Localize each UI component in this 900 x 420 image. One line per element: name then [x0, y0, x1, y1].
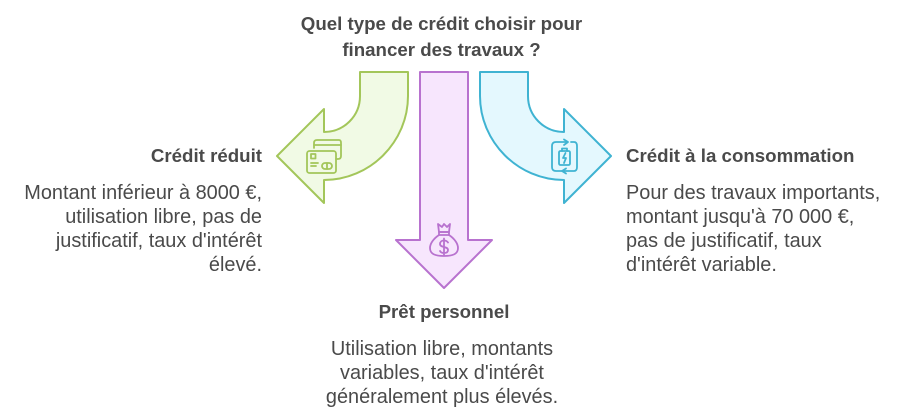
description: crédit réduit: justificatif, taux d'intérêt	[56, 230, 262, 252]
description: crédit à la consommation	[626, 182, 880, 276]
description: crédit réduit: élevé.	[209, 254, 262, 276]
heading: crédit réduit: Crédit réduit	[151, 145, 262, 166]
icon: money bag	[430, 224, 458, 256]
title: financer des travaux ?	[342, 39, 541, 60]
description: prêt personnel: variables, taux d'intérêt	[340, 362, 544, 384]
description: crédit à la consommation: Pour des travaux importants,	[626, 182, 880, 204]
description: crédit réduit: Montant inférieur à 8000 €,	[24, 182, 262, 204]
text block: crédit à la consommation	[626, 145, 880, 276]
description: crédit réduit	[24, 182, 262, 276]
arrow: crédit réduit (green)	[277, 72, 408, 203]
arrow: prêt personnel (purple)	[396, 72, 492, 288]
description: crédit à la consommation: pas de justificatif, taux	[626, 230, 822, 252]
description: crédit à la consommation: montant jusqu'à 70 000 €,	[626, 206, 854, 228]
description: prêt personnel: généralement plus élevés.	[326, 386, 558, 408]
icon: credit cards	[307, 140, 341, 173]
title: Quel type de crédit choisir pour	[301, 13, 582, 34]
text block: prêt personnel	[326, 301, 558, 408]
description: prêt personnel: Utilisation libre, montants	[331, 338, 553, 360]
description: crédit réduit: utilisation libre, pas de	[65, 206, 262, 228]
icon: battery refresh	[552, 140, 577, 174]
arrow: crédit à la consommation (blue)	[480, 72, 611, 203]
text block: crédit réduit	[24, 145, 262, 276]
description: crédit à la consommation: d'intérêt variable.	[626, 254, 777, 276]
heading: crédit à la consommation: Crédit à la consommation	[626, 145, 854, 166]
heading: prêt personnel: Prêt personnel	[379, 301, 509, 322]
description: prêt personnel	[326, 338, 558, 408]
title	[301, 13, 582, 60]
